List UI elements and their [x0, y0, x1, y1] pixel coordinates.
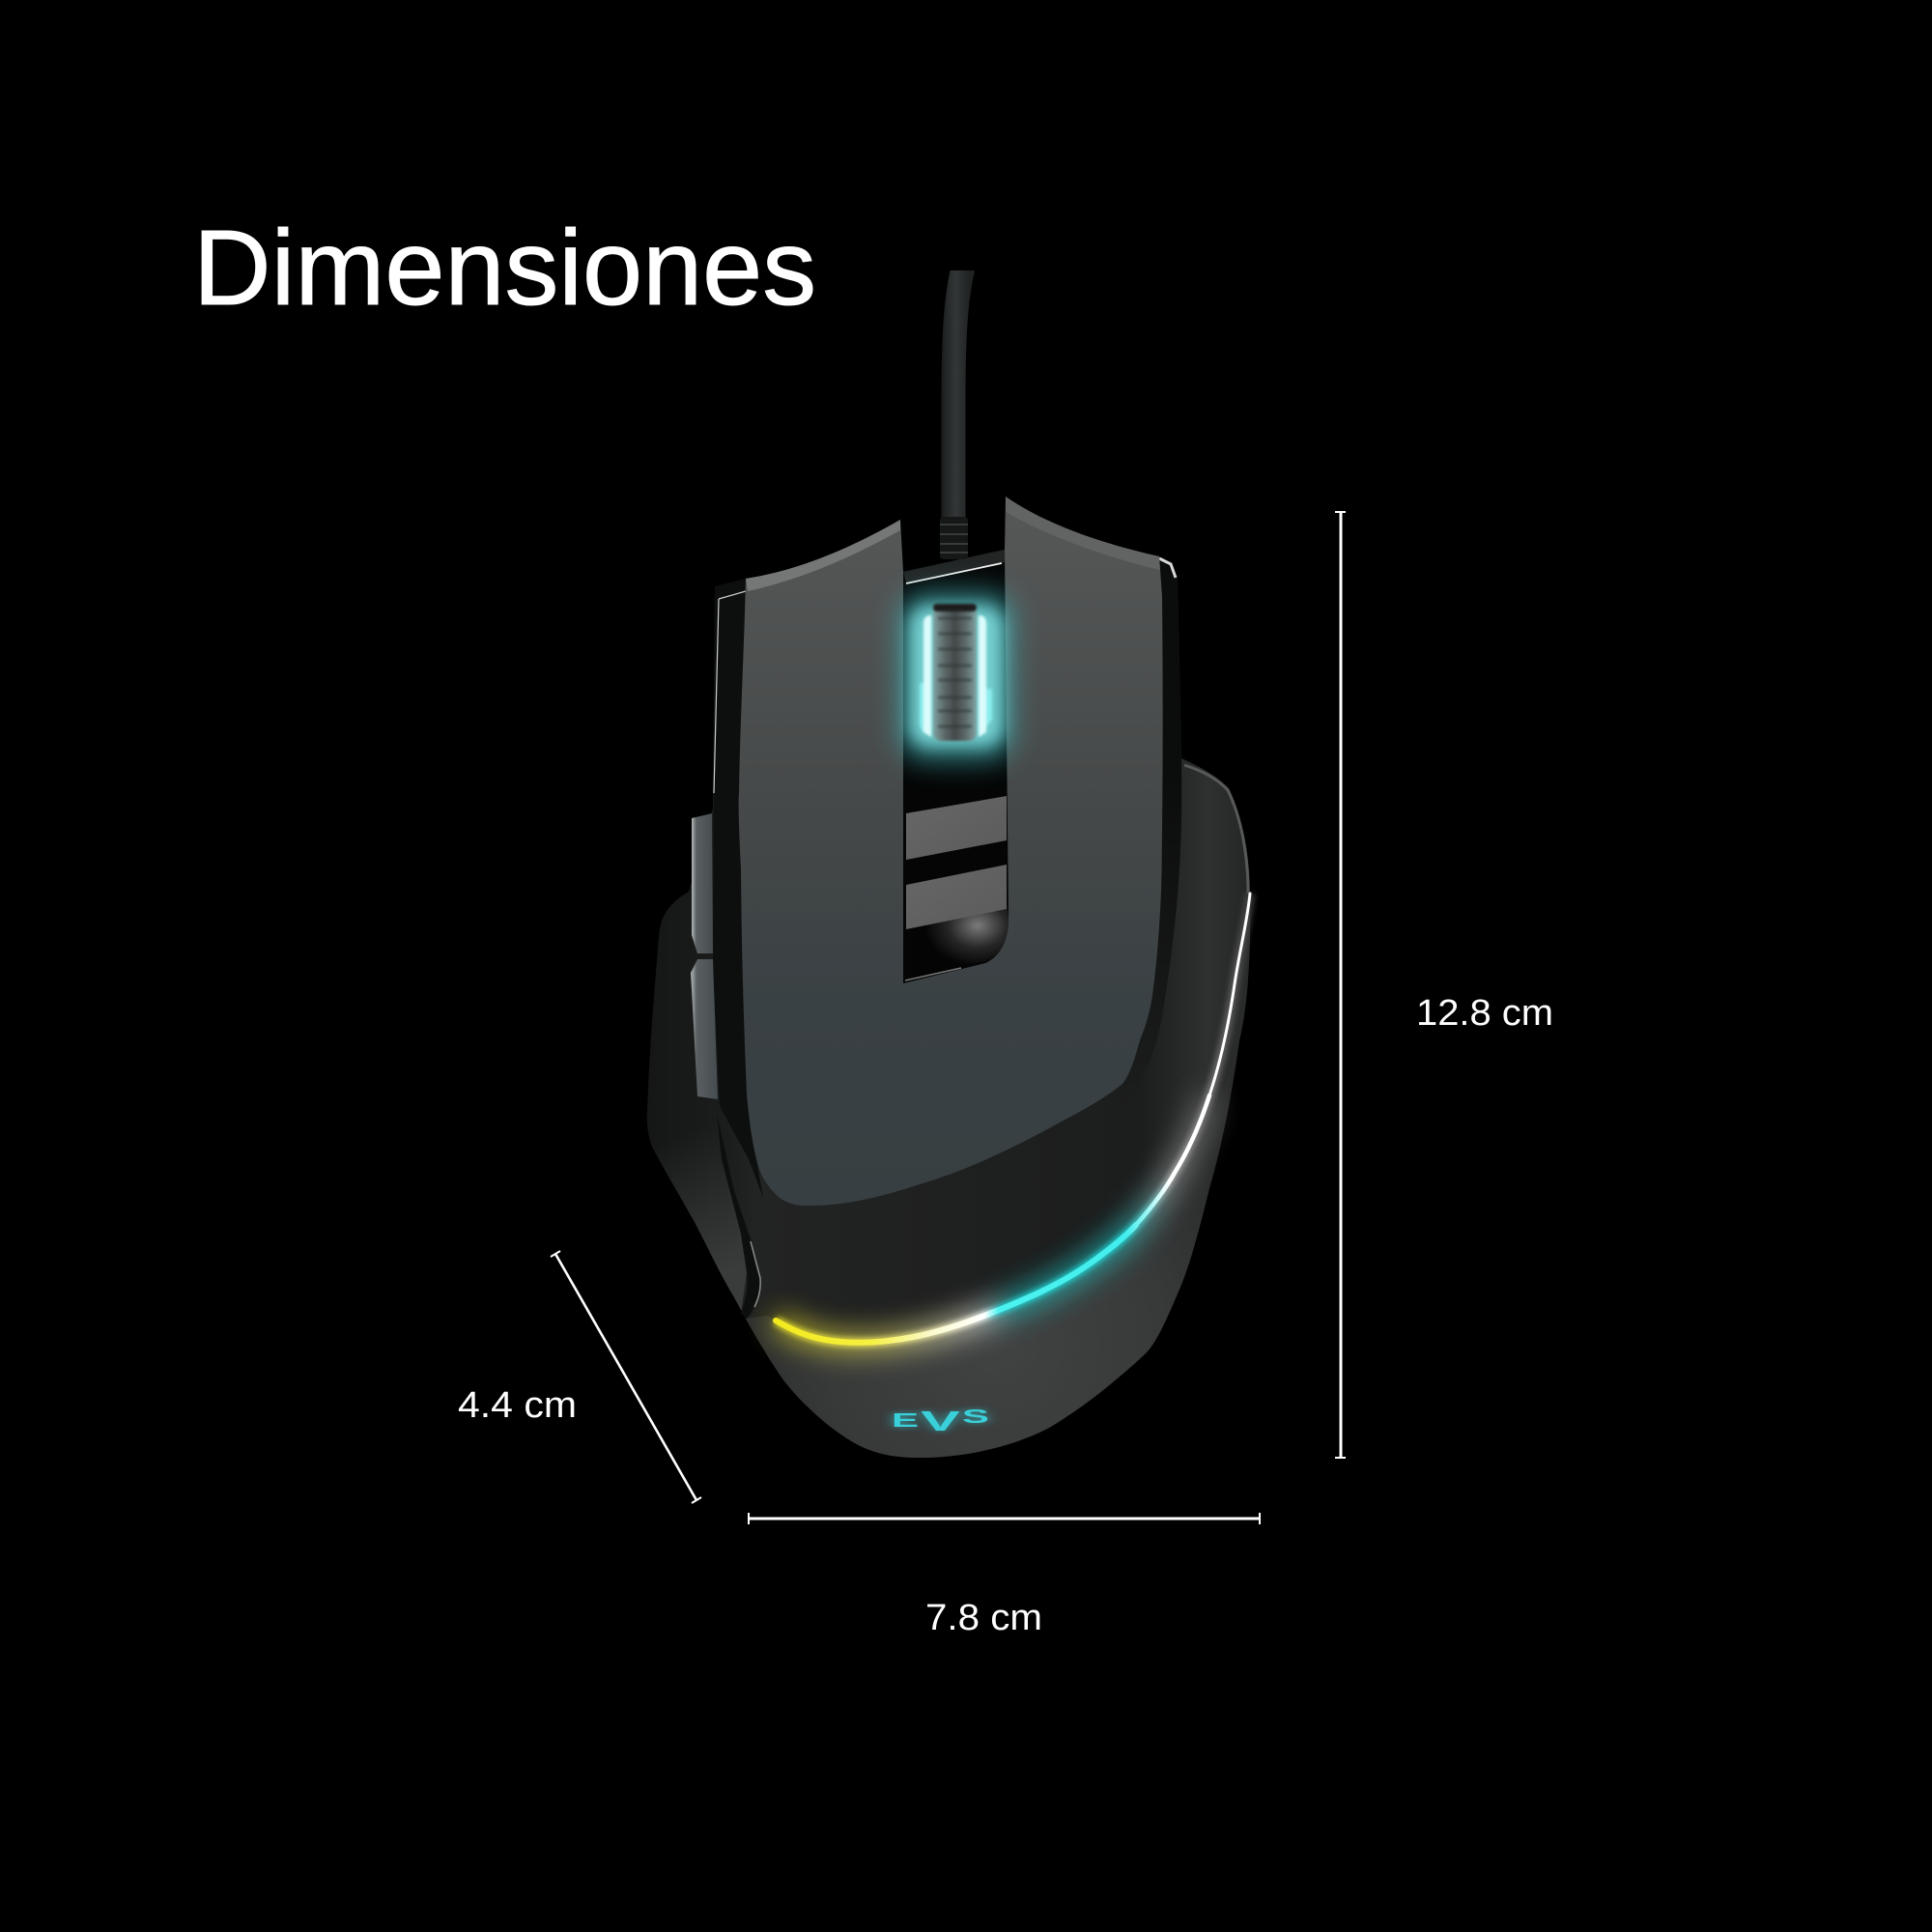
LED strip mid section [1136, 1095, 1209, 1225]
LED strip main section [776, 1225, 1136, 1343]
LED strip upper thin section [1209, 894, 1250, 1095]
EVS logo: E [892, 1409, 919, 1431]
EVS logo glow: S [962, 1406, 989, 1427]
label: width: 7.8 cm [925, 1598, 1042, 1638]
EVS logo glow: V [921, 1406, 960, 1437]
label: depth: 4.4 cm [458, 1385, 577, 1426]
top right corner highlight [1159, 558, 1176, 578]
slot bottom line [905, 968, 961, 980]
dimension: height line [1335, 512, 1346, 1458]
centre slot [903, 550, 1009, 983]
side button 1 [692, 813, 713, 953]
slot top edge [903, 550, 1005, 582]
scroll wheel [933, 604, 977, 741]
dark crease on the left flank [717, 1114, 760, 1319]
EVS logo: S [962, 1406, 989, 1427]
gloss on the thumb rest [668, 1159, 747, 1310]
title: Dimensiones [193, 209, 816, 327]
dimension: width line [749, 1513, 1260, 1524]
crease highlight [751, 1241, 760, 1307]
LED strip wide glow [776, 1095, 1209, 1343]
scroll light bars [920, 615, 992, 737]
right side strip [1111, 556, 1181, 1121]
mouse illustration [647, 256, 1285, 1478]
rim highlight on palm rest [1184, 765, 1248, 894]
infographic canvas [201, 226, 1551, 1631]
EVS logo glow: E [892, 1409, 919, 1431]
label: height: 12.8 cm [1416, 993, 1553, 1034]
LED strip glow [776, 894, 1250, 1343]
cable [940, 256, 968, 559]
EVS logo: V [921, 1406, 960, 1437]
lower shell under the light strip [668, 763, 1250, 1458]
left side strip [713, 579, 763, 1198]
slot bottom gloss [912, 903, 1009, 978]
scroll wheel glow [898, 591, 1014, 761]
main button panel [739, 497, 1163, 1206]
DPI button 2 [906, 865, 1007, 929]
left button light band [746, 520, 900, 591]
right button band [1006, 497, 1160, 570]
DPI button 1 [906, 796, 1007, 860]
side button 2 [691, 959, 718, 1099]
dimension: depth line [551, 1251, 701, 1503]
mouse body shell [647, 577, 1250, 1458]
slot white line [906, 563, 1002, 583]
thin white edge on left strip [714, 591, 746, 793]
